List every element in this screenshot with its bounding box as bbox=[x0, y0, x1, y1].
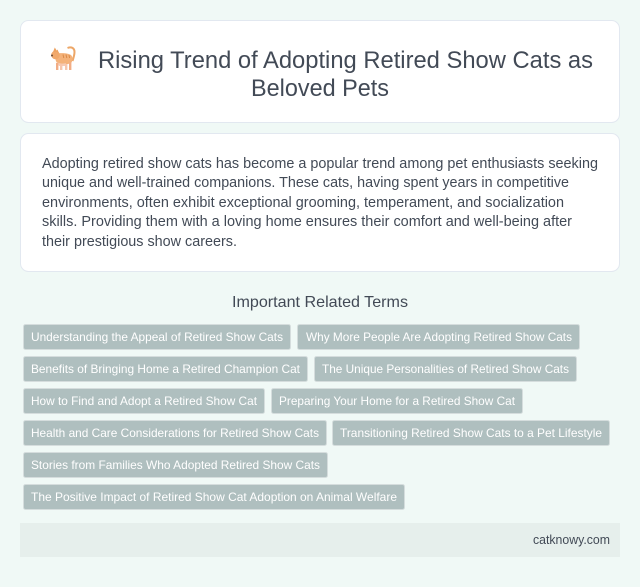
tag bbox=[314, 356, 576, 382]
tag: Health and Care Considerations for Retired Show Cats bbox=[31, 426, 319, 440]
tag: How to Find and Adopt a Retired Show Cat bbox=[31, 394, 258, 408]
panel: description bbox=[20, 134, 620, 272]
tag: Why More People Are Adopting Retired Show Cats bbox=[306, 330, 572, 344]
footer: catknowy.com bbox=[533, 532, 610, 547]
heading: related terms: Important Related Terms bbox=[232, 294, 408, 311]
tag bbox=[24, 452, 328, 478]
tag bbox=[24, 356, 308, 382]
footer bbox=[20, 523, 620, 557]
tag: Benefits of Bringing Home a Retired Champion Cat bbox=[31, 362, 301, 376]
tag: Transitioning Retired Show Cats to a Pet Lifestyle bbox=[340, 426, 602, 440]
tag bbox=[272, 388, 522, 414]
title: Beloved Pets bbox=[251, 75, 389, 102]
tag list bbox=[24, 324, 610, 510]
tag: The Unique Personalities of Retired Show Cats bbox=[322, 362, 569, 376]
tag bbox=[24, 420, 326, 446]
description text: their prestigious show careers. bbox=[42, 233, 237, 250]
panel: title card bbox=[20, 20, 620, 122]
description text bbox=[42, 155, 598, 250]
title: Rising Trend of Adopting Retired Show Cats as bbox=[98, 47, 593, 74]
tag: The Positive Impact of Retired Show Cat Adoption on Animal Welfare bbox=[31, 490, 397, 504]
description text: Adopting retired show cats has become a popular trend among pet enthusiasts seeking bbox=[42, 155, 598, 172]
title bbox=[98, 47, 593, 102]
tag bbox=[332, 420, 610, 446]
tag: Stories from Families Who Adopted Retired Show Cats bbox=[31, 458, 320, 472]
tag: Understanding the Appeal of Retired Show Cats bbox=[31, 330, 283, 344]
tag bbox=[24, 388, 264, 414]
tag bbox=[298, 324, 580, 350]
description text: skills. Providing them with a loving home ensures their comfort and well-being after bbox=[42, 213, 572, 230]
tag bbox=[24, 324, 290, 350]
icon: cat bbox=[51, 47, 74, 70]
tag bbox=[24, 484, 404, 510]
description text: unique and well-trained companions. These cats, having spent years in competitive bbox=[42, 174, 569, 191]
tag: Preparing Your Home for a Retired Show Cat bbox=[279, 394, 516, 408]
description text: environments, often exhibit exceptional grooming, temperament, and socialization bbox=[42, 194, 564, 211]
